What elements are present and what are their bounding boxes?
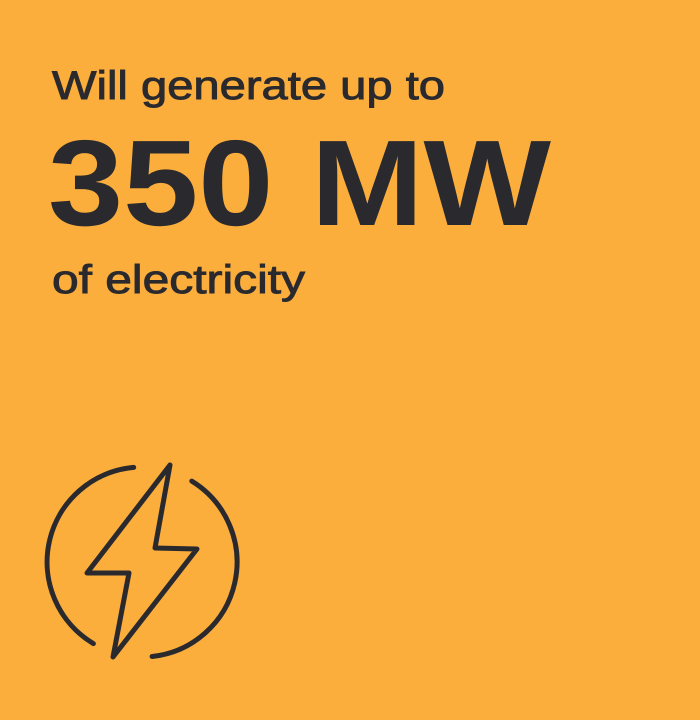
heading: Will generate up to: Will generate up to — [52, 64, 445, 108]
subheading: of electricity: of electricity — [52, 258, 305, 302]
icon: lightning bolt in circle — [47, 465, 237, 657]
big number: 350 MW: 350 MW — [48, 115, 552, 251]
